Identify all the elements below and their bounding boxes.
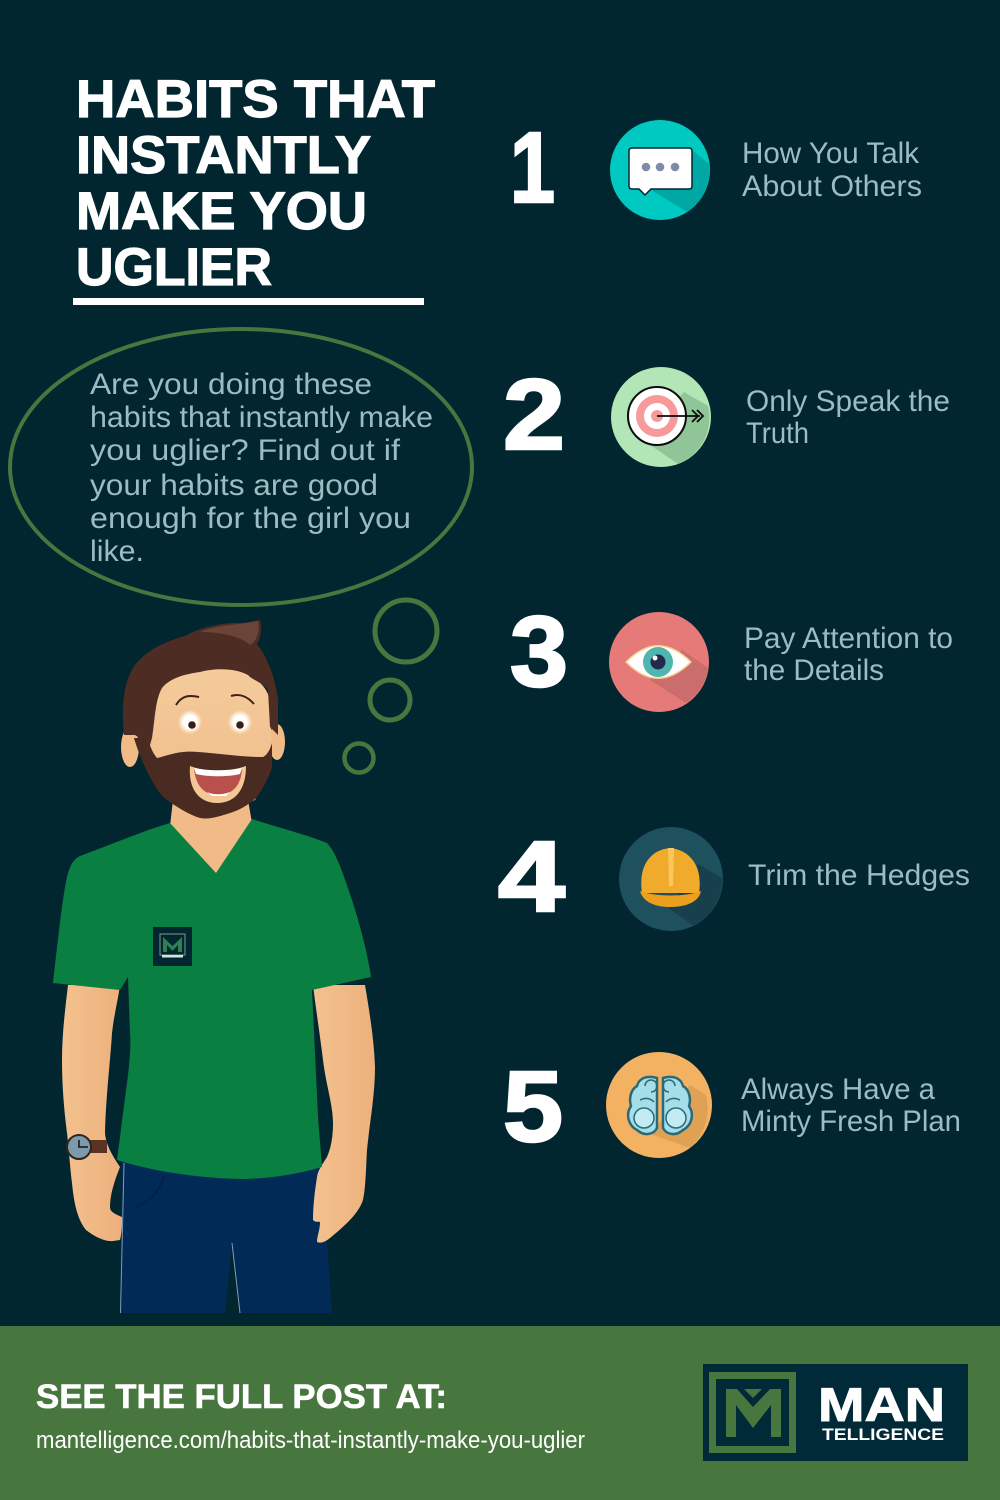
- icon: brain: [606, 1052, 712, 1158]
- hair highlight: [200, 621, 259, 645]
- hair: [123, 620, 278, 745]
- label 2: [746, 385, 950, 450]
- label 5: [741, 1073, 961, 1138]
- wristwatch: [67, 1135, 107, 1159]
- number 1: 1: [510, 112, 555, 224]
- shirt: [53, 819, 371, 1179]
- item 5: [503, 1051, 961, 1163]
- bubble text: [90, 368, 433, 568]
- neck: [170, 800, 252, 876]
- bubble text: enough for the girl you: [90, 502, 411, 535]
- icon: speech bubble: [610, 120, 710, 220]
- mouth: [190, 766, 246, 803]
- ears: [121, 727, 139, 767]
- title: [73, 70, 435, 305]
- label 1: About Others: [742, 170, 922, 203]
- icon: eye: [609, 612, 709, 712]
- number 3: 3: [510, 596, 568, 708]
- bubble text: your habits are good: [90, 469, 378, 502]
- thought bubble: [10, 329, 472, 772]
- number 4: 4: [498, 821, 565, 933]
- label 3: [744, 622, 953, 687]
- beard: [134, 738, 272, 819]
- logo: [703, 1364, 968, 1461]
- bubble text: like.: [90, 535, 144, 568]
- bubble text: habits that instantly make: [90, 401, 433, 434]
- label 3: the Details: [744, 654, 884, 687]
- item 4: [498, 821, 970, 933]
- label 4: Trim the Hedges: [748, 859, 970, 892]
- title: INSTANTLY: [76, 126, 371, 185]
- footer heading: SEE THE FULL POST AT:: [36, 1378, 447, 1416]
- title: HABITS THAT: [76, 70, 435, 129]
- item 2: [503, 359, 950, 471]
- bubble text: Are you doing these: [90, 368, 372, 401]
- footer banner: [0, 1326, 1000, 1500]
- eyes: [176, 695, 254, 734]
- bubble text: you uglier? Find out if: [90, 434, 401, 467]
- left arm: [62, 985, 122, 1241]
- item 1: [510, 112, 922, 224]
- icon: target with arrow: [611, 367, 711, 467]
- label 2: Only Speak the: [746, 385, 950, 418]
- right arm: [313, 985, 375, 1243]
- number 5: 5: [503, 1051, 563, 1163]
- title: MAKE YOU: [76, 182, 367, 241]
- logo: TELLIGENCE: [822, 1425, 944, 1444]
- face: [148, 668, 272, 815]
- item 3: [510, 596, 953, 712]
- number 2: 2: [503, 359, 565, 471]
- label 2: Truth: [746, 417, 809, 450]
- title: UGLIER: [76, 238, 272, 297]
- icon: hard hat: [619, 827, 723, 931]
- label 1: [742, 137, 922, 203]
- label 1: How You Talk: [742, 137, 920, 170]
- character illustration: [53, 620, 375, 1313]
- label 3: Pay Attention to: [744, 622, 953, 655]
- logo: MAN: [818, 1378, 945, 1431]
- footer url: mantelligence.com/habits-that-instantly-make-you-uglier: [36, 1427, 585, 1454]
- pants: [120, 1160, 332, 1313]
- label 5: Minty Fresh Plan: [741, 1105, 961, 1138]
- label 5: Always Have a: [741, 1073, 935, 1106]
- shirt badge: [153, 927, 192, 966]
